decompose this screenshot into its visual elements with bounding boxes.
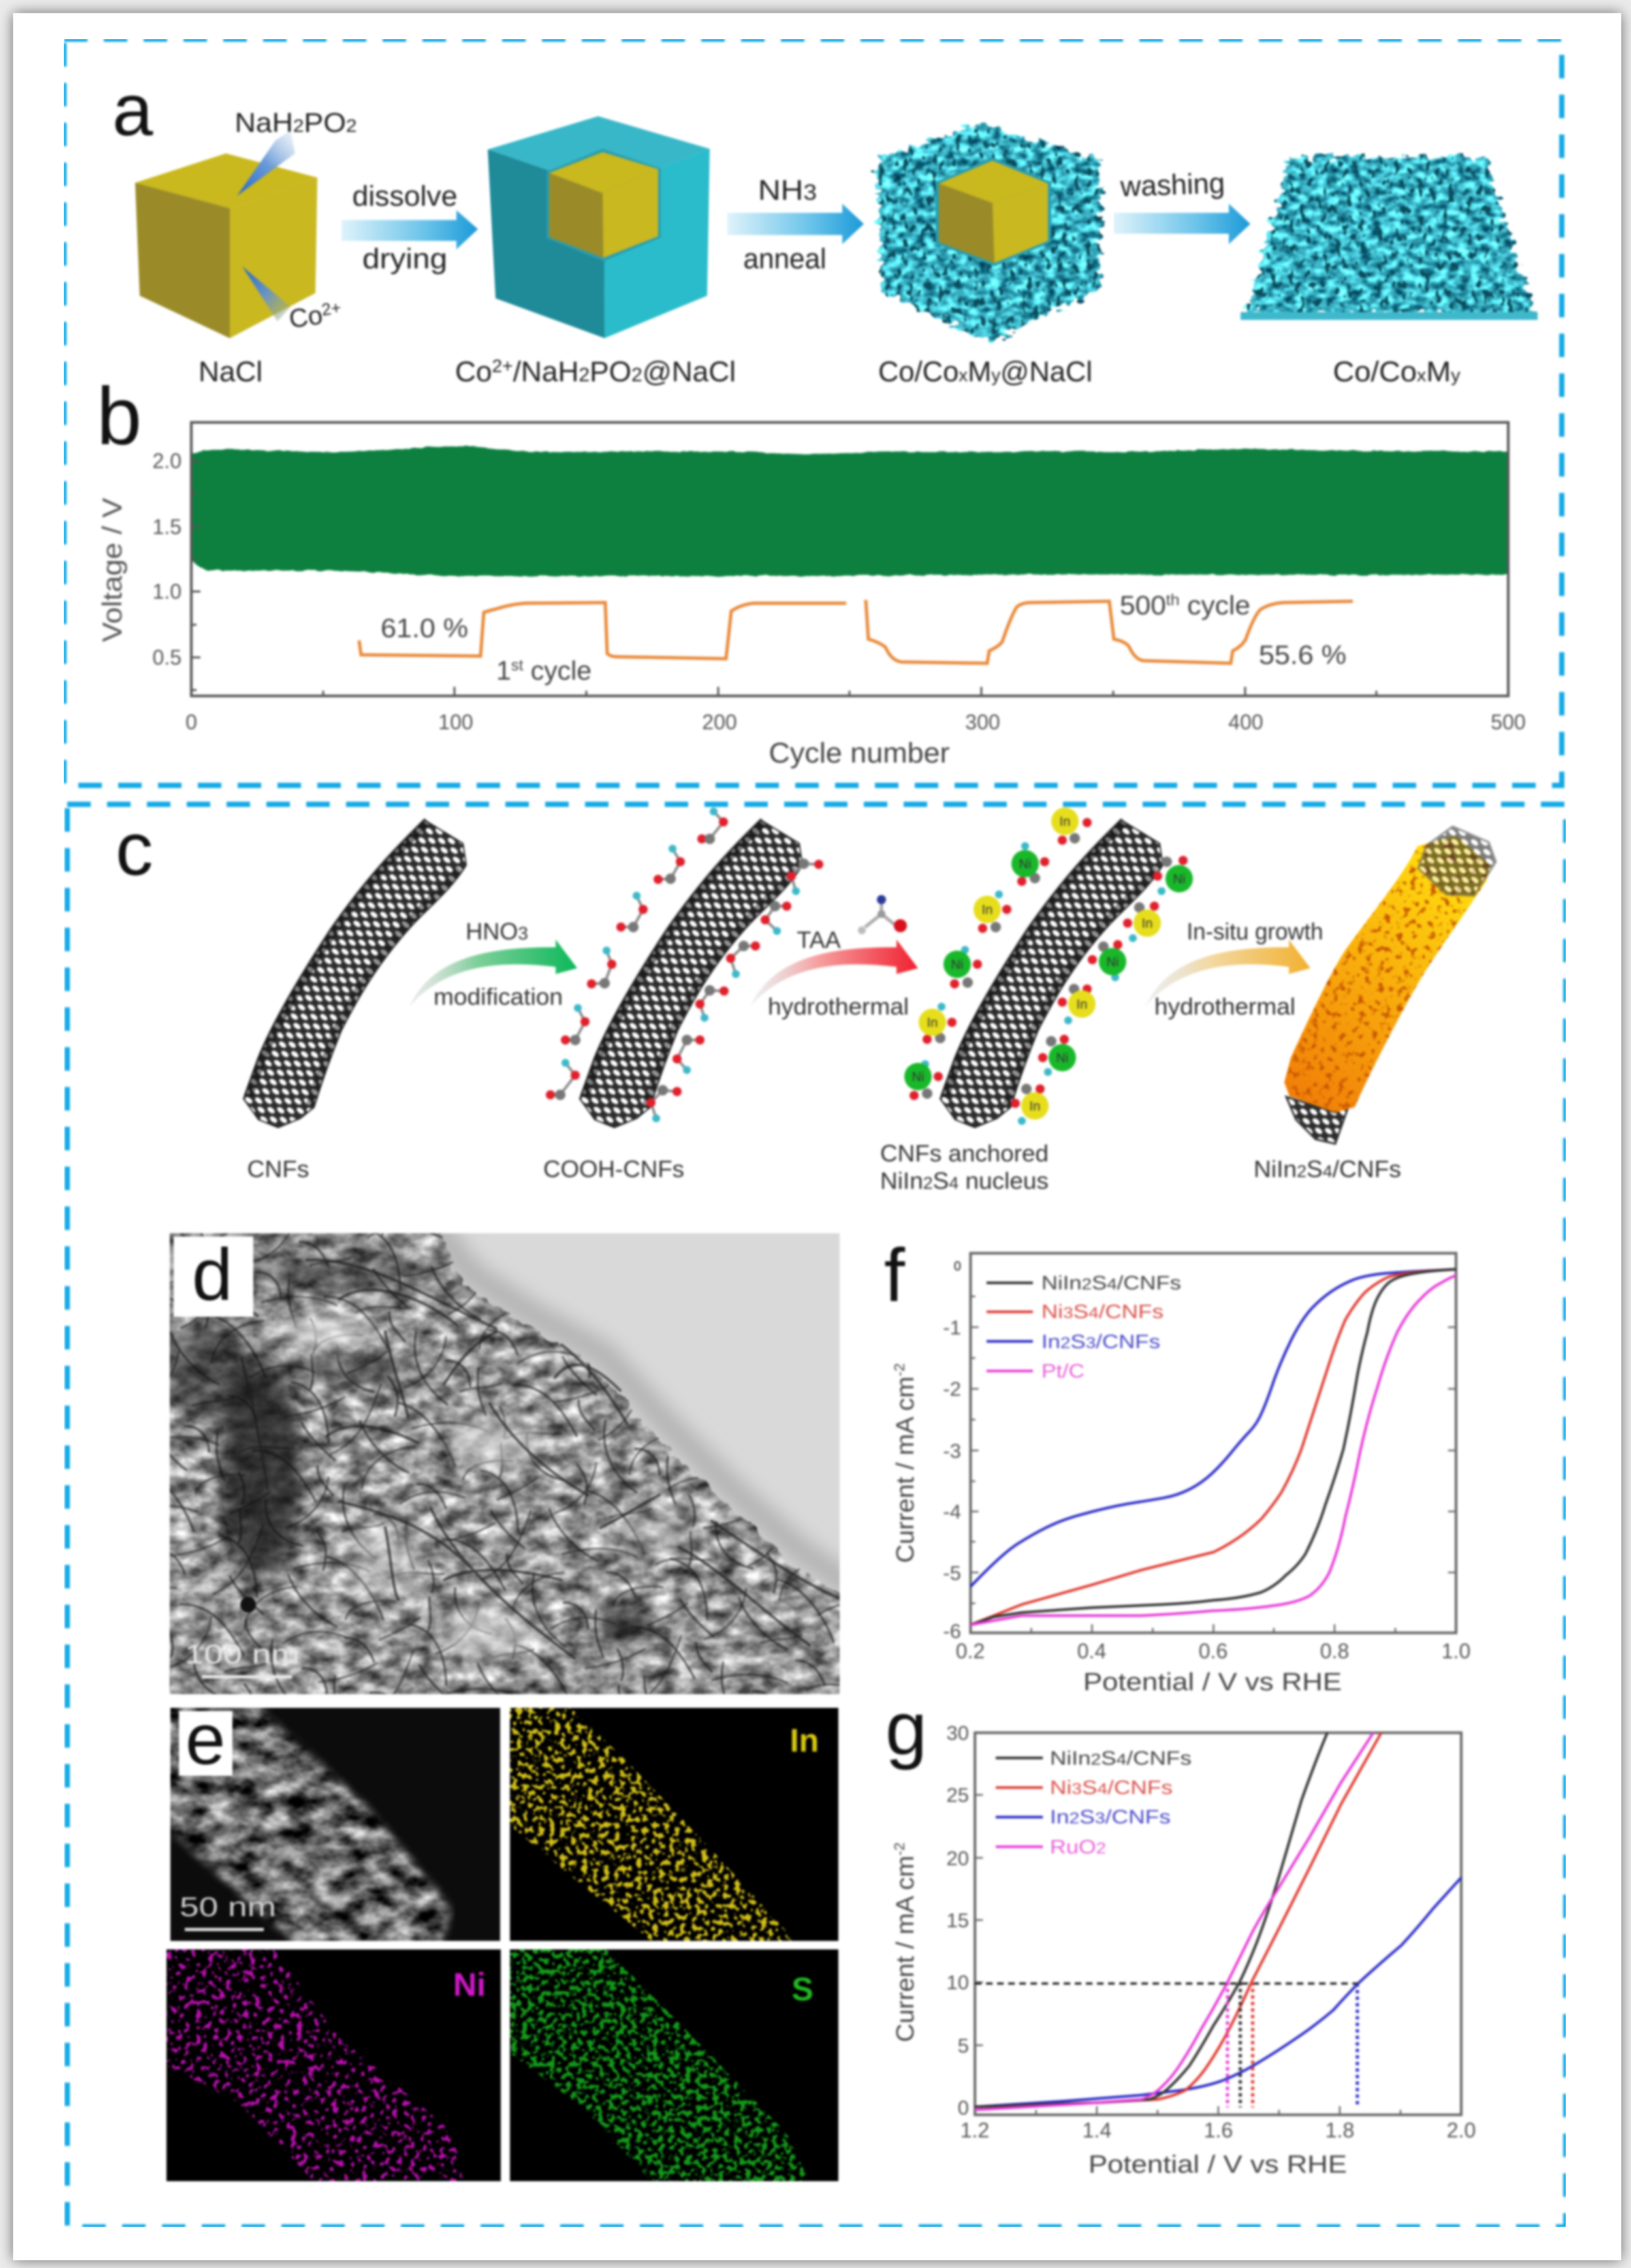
y axis tick labels: 0.5: [153, 646, 182, 669]
caption Co/CoxMy: Co/CoxMy: [1333, 356, 1460, 388]
panel letter d: d: [192, 1234, 232, 1315]
f y tick labels: 0: [954, 1259, 961, 1274]
x axis tick labels: 200: [702, 710, 737, 734]
x axis title: Cycle number: [769, 737, 949, 769]
chart annotations: 1: [496, 655, 511, 685]
panel letter e: e: [185, 1699, 225, 1780]
y axis title: Voltage / V: [97, 497, 127, 642]
g legend: [1050, 1748, 1192, 1858]
scale bar 50 nm: [185, 1928, 264, 1931]
panel letter a: a: [112, 69, 153, 151]
Co2+ label: 2+: [321, 298, 342, 319]
f y tick labels: -5: [943, 1562, 961, 1584]
In and Ni nuclei on tube: In: [1077, 998, 1087, 1012]
g y axis title: Current / mA cm: [892, 1863, 919, 2042]
panel letter e box: [179, 1711, 232, 1776]
y axis tick labels: 2.0: [153, 449, 182, 473]
f y tick labels: -4: [943, 1500, 961, 1523]
drying label: drying: [362, 243, 447, 275]
g x tick labels: 2.0: [1447, 2118, 1476, 2142]
arrow yellow: [1145, 939, 1310, 1007]
NaH2PO2 label: NaH2PO2: [235, 107, 356, 138]
g x tick labels: 1.8: [1325, 2118, 1354, 2142]
plot box and ticks: [191, 422, 1508, 696]
Ni map: [166, 1949, 501, 2181]
dashed frame: panels a and b: [64, 39, 1562, 785]
g x tick labels: 1.4: [1083, 2118, 1111, 2142]
NaCl caption: NaCl: [198, 356, 262, 388]
STEM tile: [157, 1704, 500, 1952]
In and Ni nuclei on tube: In: [982, 903, 992, 917]
TAA molecule: [858, 895, 907, 934]
In and Ni nuclei on tube: In: [927, 1016, 938, 1030]
f x axis title: Potential / V vs RHE: [1083, 1669, 1342, 1696]
caption Co2+/NaH2PO2@NaCl: Co: [455, 356, 492, 388]
g legend: NiIn 2S4/CNFs: [1050, 1748, 1192, 1769]
panel a: synthesis scheme: [112, 69, 1538, 388]
g y tick labels: [947, 1722, 969, 2119]
y axis tick labels: [153, 449, 182, 669]
NaCl cube: [135, 153, 317, 338]
S map: [510, 1949, 838, 2181]
f plot area: [970, 1253, 1456, 1633]
f y tick labels: [943, 1259, 961, 1643]
f x tick labels: 0.4: [1077, 1639, 1106, 1663]
g y tick labels: 15: [947, 1909, 969, 1932]
x axis tick labels: 0: [185, 710, 197, 734]
y axis tick labels: 1.5: [153, 515, 182, 539]
In and Ni nuclei on tube: [904, 808, 1193, 1125]
g legend: In2S3/CNFs: [1050, 1806, 1171, 1828]
scheme labels: CNFs anchored: [880, 1140, 1049, 1167]
scheme labels: modification: [434, 983, 563, 1010]
arrow 1: [341, 210, 478, 249]
chart annotations: 500: [1120, 590, 1164, 620]
Co2+ injection wedge: [242, 266, 291, 321]
g y tick labels: 0: [958, 2096, 969, 2119]
g y axis title: -2: [891, 1842, 908, 1855]
anneal label: anneal: [743, 243, 827, 275]
NiIn2S4 coated tube: [1284, 827, 1496, 1144]
TEM specimen halo: [431, 1221, 855, 1590]
panel d: TEM micrograph: [157, 1221, 855, 1710]
f y tick labels: -1: [943, 1316, 961, 1339]
f legend: [1041, 1272, 1181, 1382]
panel letter c: c: [116, 808, 153, 891]
scheme labels: CNFs: [247, 1156, 309, 1182]
chart annotations: th: [1166, 591, 1180, 609]
f x tick labels: 0.8: [1320, 1639, 1349, 1663]
g x tick labels: 1.2: [960, 2118, 989, 2142]
g plot area: [975, 1733, 1461, 2115]
f y tick labels: -6: [943, 1620, 961, 1643]
scheme labels: TAA: [797, 926, 841, 953]
arrow 2: [727, 204, 864, 244]
carboxyl groups on tube: [546, 808, 823, 1122]
scheme labels: hydrothermal: [1154, 993, 1295, 1020]
scheme labels: [247, 918, 1401, 1194]
COOH-CNF tube: [580, 820, 802, 1127]
f y tick labels: -3: [943, 1440, 961, 1462]
g legend: RuO 2: [1050, 1836, 1106, 1858]
f x tick labels: [956, 1639, 1470, 1663]
In and Ni nuclei on tube: In: [1142, 917, 1152, 931]
scale label 100 nm: 100 nm: [185, 1639, 300, 1669]
In and Ni nuclei on tube: Ni: [951, 958, 963, 972]
chart annotations: 61.0 %: [381, 613, 468, 643]
TEM nanosheet fibres crossing: [157, 1221, 855, 1710]
panel g: OER polarization chart: [885, 1687, 1476, 2179]
flaky film: [1241, 157, 1538, 320]
panel c: nanofiber scheme: [116, 808, 1496, 1194]
dissolve label: dissolve: [353, 180, 457, 212]
green voltage band: [191, 447, 1508, 576]
chart annotations: [381, 590, 1346, 685]
panel letter b: b: [97, 371, 142, 462]
g y tick labels: 5: [958, 2034, 969, 2057]
panel b: cycling chart: [97, 371, 1526, 769]
panel letter f: f: [884, 1234, 906, 1317]
arrow green: [409, 939, 577, 1007]
orange voltage profile 500th cycle: [866, 600, 1353, 663]
scheme labels: In-situ growth: [1187, 918, 1323, 945]
g y tick labels: 30: [947, 1722, 969, 1744]
In and Ni nuclei on tube: In: [1030, 1099, 1040, 1114]
NH3 label: NH3: [758, 174, 817, 206]
f x tick labels: 0.6: [1199, 1639, 1227, 1663]
S map: S: [791, 1971, 814, 2008]
g x tick labels: [960, 2118, 1476, 2142]
washing label: washing: [1119, 167, 1226, 203]
dashed frame: panels c to g: [67, 804, 1566, 2227]
panel letter g: g: [885, 1687, 927, 1771]
scheme labels: HNO3: [466, 918, 528, 945]
g y tick labels: 10: [947, 1971, 969, 1994]
g y tick labels: 25: [947, 1784, 969, 1806]
scale label 50 nm: 50 nm: [180, 1891, 276, 1922]
f legend: NiIn 2S4/CNFs: [1041, 1272, 1181, 1294]
scale bar 100 nm: [202, 1675, 292, 1678]
f legend: Ni3S4/CNFs: [1041, 1301, 1164, 1323]
In and Ni nuclei on tube: Ni: [1019, 857, 1031, 872]
flaky cube: [876, 124, 1100, 343]
arrow 3: [1114, 204, 1250, 244]
teal shell cube with window: [488, 116, 710, 338]
In map: In: [790, 1722, 819, 1759]
f y tick labels: -2: [943, 1378, 961, 1400]
x axis tick labels: 500: [1491, 710, 1526, 734]
f x tick labels: 1.0: [1442, 1639, 1470, 1663]
f legend: Pt/C: [1041, 1361, 1085, 1382]
TEM nanosheet fibres: [157, 1221, 855, 1710]
g legend: Ni3S4/CNFs: [1050, 1777, 1173, 1799]
In map: [510, 1708, 838, 1941]
CNF tube: [244, 820, 466, 1127]
In and Ni nuclei on tube: Ni: [1107, 955, 1118, 969]
In and Ni nuclei on tube: Ni: [1056, 1051, 1068, 1065]
arrow red: [750, 939, 918, 1007]
nucleus-anchored tube: [940, 820, 1163, 1127]
In and Ni nuclei on tube: In: [1060, 815, 1070, 829]
caption Co/CoxMy@NaCl: Co/CoxMy@NaCl: [878, 356, 1092, 388]
panel letter d box: [174, 1236, 253, 1317]
panel e: elemental maps: [157, 1699, 838, 2181]
TEM dark fibres: [242, 1260, 839, 1658]
chart annotations: 55.6 %: [1259, 640, 1346, 670]
scheme labels: NiIn2S4 nucleus: [880, 1167, 1049, 1194]
caption Co2+/NaH2PO2@NaCl: /NaH: [513, 356, 578, 388]
scheme labels: NiIn2S4/CNFs: [1254, 1156, 1401, 1182]
f y axis title: Current / mA cm: [892, 1384, 919, 1563]
TEM dark spot: [240, 1597, 256, 1613]
x axis tick labels: [185, 710, 1526, 734]
f x tick labels: 0.2: [956, 1639, 985, 1663]
y axis tick labels: 1.0: [153, 580, 182, 603]
orange voltage profile 1st cycle: [359, 603, 846, 659]
f legend: In2S3/CNFs: [1041, 1331, 1160, 1353]
f y axis title: -2: [891, 1363, 908, 1376]
Co2+ label: Co: [287, 301, 325, 334]
Ni map: Ni: [453, 1966, 486, 2003]
scheme labels: COOH-CNFs: [543, 1156, 684, 1182]
chart annotations: st: [511, 657, 524, 674]
g x axis title: Potential / V vs RHE: [1088, 2151, 1347, 2179]
x axis tick labels: 400: [1228, 710, 1263, 734]
TEM specimen: [157, 1221, 855, 1710]
g y tick labels: 20: [947, 1847, 969, 1870]
chart annotations: cycle: [523, 655, 592, 685]
panel f: ORR polarization chart: [884, 1234, 1470, 1696]
g x tick labels: 1.6: [1204, 2118, 1233, 2142]
In and Ni nuclei on tube: Ni: [912, 1070, 924, 1084]
In and Ni nuclei on tube: Ni: [1173, 872, 1185, 887]
caption Co2+/NaH2PO2@NaCl: 2+: [492, 356, 513, 376]
x axis tick labels: 100: [438, 710, 473, 734]
x axis tick labels: 300: [965, 710, 1000, 734]
caption Co2+/NaH2PO2@NaCl: 2PO2@NaCl: [578, 356, 735, 388]
NaH2PO2 injection wedge: [237, 131, 295, 196]
TEM background: [170, 1233, 840, 1694]
scheme labels: hydrothermal: [768, 993, 909, 1020]
chart annotations: cycle: [1180, 590, 1250, 620]
